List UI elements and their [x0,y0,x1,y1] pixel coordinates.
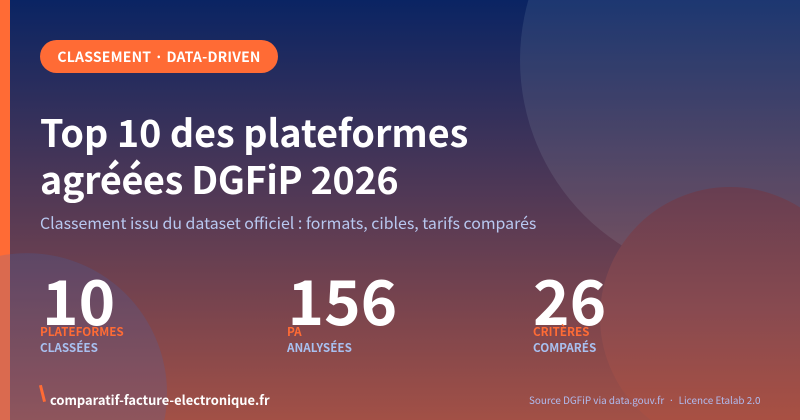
stat label line 1: PA [287,323,302,340]
stat label line 2: CLASSÉES [40,339,98,356]
left accent bar [0,0,10,420]
stat number: 156 [288,253,397,343]
badge: CLASSEMENT · DATA-DRIVEN [57,47,261,67]
title [40,103,468,204]
circle: bottom right [600,187,800,420]
circle: top right [520,0,800,280]
stat: plateformes classées [40,253,124,356]
icon: orange slash [39,385,46,402]
source credit: Source DGFiP via data.gouv.fr · Licence Etalab 2.0 [529,393,760,407]
badge [40,40,278,73]
stat label line 1: PLATEFORMES [40,323,124,340]
stat label line 2: ANALYSÉES [287,339,352,356]
subtitle: Classement issu du dataset officiel : formats, cibles, tarifs comparés [40,211,536,234]
stat: PA analysées [287,253,397,356]
stat label line 2: COMPARÉS [533,339,596,356]
stat number: 26 [533,253,606,343]
title: Top 10 des plateformes [40,103,468,158]
circle: bottom left [0,253,167,420]
stat label line 1: CRITÈRES [533,323,589,340]
title: agréées DGFiP 2026 [40,150,398,204]
website url: comparatif-facture-electronique.fr [50,390,270,409]
stat number: 10 [42,253,115,343]
stat: critères comparés [533,253,606,356]
